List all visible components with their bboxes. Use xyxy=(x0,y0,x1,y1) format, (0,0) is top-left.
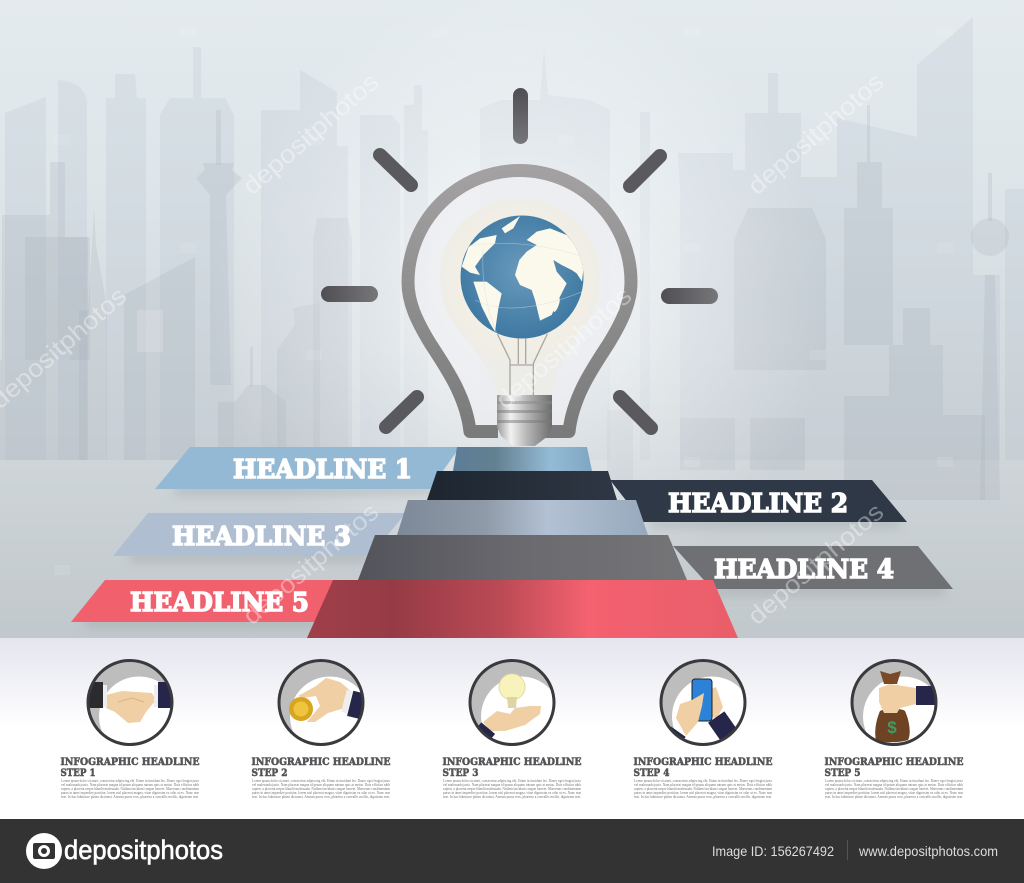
text block: step 4: Lorem ipsum dolor sit amet, consectetur adipiscing elit. Etiam in tincidunt leo. Donec eget feugiat justo xyxy=(634,779,772,784)
skyline xyxy=(0,0,1024,640)
text block: step 1: STEP 1 xyxy=(60,768,96,779)
text block: step 3: purus in amet imperdiet porttitor, lorem nisl placerat magna, vitae dignissim ex odio ut ex. Nunc non xyxy=(443,791,581,796)
text block: step 2: purus in amet imperdiet porttitor, lorem nisl placerat magna, vitae dignissim ex odio ut ex. Nunc non xyxy=(252,791,390,796)
ribbon: headline 4 xyxy=(673,546,953,589)
watermarks: depositphotos xyxy=(491,282,637,415)
text block: step 5: sapien, a placerat neque blandit malesuada. Nullam tincidunt congue laoreet. Maecenas condimentum xyxy=(825,787,963,792)
text block: step 1 xyxy=(60,757,200,800)
text block: step 2: sapien, a placerat neque blandit malesuada. Nullam tincidunt congue laoreet. Maecenas condimentum xyxy=(252,787,390,792)
text block: step 5: vel malesuada justo. Nam placerat magna id ipsum aliquam rutrum quis at metus. Duis efficitur nibh xyxy=(825,783,963,787)
ribbon: headline 3 xyxy=(113,513,406,556)
text block: step 3: Lorem ipsum dolor sit amet, consectetur adipiscing elit. Etiam in tincidunt leo. Donec eget feugiat justo xyxy=(443,779,581,784)
watermarks: depositphotos xyxy=(238,68,384,201)
step 3 xyxy=(397,500,648,535)
step 5 xyxy=(307,580,738,638)
watermarks xyxy=(0,68,889,631)
text block: step 3: sapien, a placerat neque blandit malesuada. Nullam tincidunt congue laoreet. Maecenas condimentum xyxy=(443,787,581,792)
text block: step 4: vel malesuada justo. Nam placerat magna id ipsum aliquam rutrum quis at metus. Duis efficitur nibh xyxy=(634,783,772,787)
light rays xyxy=(321,88,718,428)
text block: step 2: INFOGRAPHIC HEADLINE xyxy=(252,757,391,768)
text block: step 4 xyxy=(634,757,773,800)
step 4 xyxy=(358,535,687,580)
text block: step 1: vel malesuada justo. Nam placerat magna id ipsum aliquam rutrum quis at metus. Duis efficitur nibh xyxy=(61,783,199,787)
ribbon: headline 1 xyxy=(155,447,460,489)
text block: step 2 xyxy=(252,757,391,800)
text block: step 1: Lorem ipsum dolor sit amet, consectetur adipiscing elit. Etiam in tincidunt leo. Donec eget feugiat justo xyxy=(61,779,199,784)
text block: step 5: STEP 5 xyxy=(824,768,861,779)
text block: step 1: INFOGRAPHIC HEADLINE xyxy=(60,757,200,768)
step 1 xyxy=(453,447,592,471)
text block: step 2: STEP 2 xyxy=(252,768,288,779)
footer bar xyxy=(0,819,1024,883)
text block: step 1: erat. In hac habitasse platea dictumst. Aenean purus eros, pharetra a convallis mollis, dignissim erat. xyxy=(61,795,199,800)
bulb glass xyxy=(440,199,600,395)
ribbon: headline 2: HEADLINE 2 xyxy=(668,489,848,519)
ribbon: headline 4: HEADLINE 4 xyxy=(714,555,894,585)
text block: step 3: vel malesuada justo. Nam placerat magna id ipsum aliquam rutrum quis at metus. Duis efficitur nibh xyxy=(443,783,581,787)
icon: hand with bulb xyxy=(468,659,556,746)
stepped pyramid xyxy=(307,447,738,638)
lower panel xyxy=(0,638,1024,819)
text block: step 2: Lorem ipsum dolor sit amet, consectetur adipiscing elit. Etiam in tincidunt leo. Donec eget feugiat justo xyxy=(252,779,390,784)
step 2 xyxy=(427,471,617,500)
icon: handshake xyxy=(86,659,174,746)
ribbon: headline 5 xyxy=(71,580,340,622)
text block: step 2: erat. In hac habitasse platea dictumst. Aenean purus eros, pharetra a convallis mollis, dignissim erat. xyxy=(252,795,390,800)
globe xyxy=(460,216,587,338)
watermarks: depositphotos xyxy=(238,498,384,631)
bulb outline xyxy=(408,171,631,432)
text block: step 5: purus in amet imperdiet porttitor, lorem nisl placerat magna, vitae dignissim ex odio ut ex. Nunc non xyxy=(825,791,963,796)
background xyxy=(0,0,1024,640)
watermarks: depositphotos xyxy=(743,498,889,631)
text block: step 5: erat. In hac habitasse platea dictumst. Aenean purus eros, pharetra a convallis mollis, dignissim erat. xyxy=(825,795,963,800)
ribbon: headline 2 xyxy=(610,480,907,522)
watermarks: depositphotos xyxy=(743,68,889,201)
text block: step 5: INFOGRAPHIC HEADLINE xyxy=(824,757,964,768)
lightbulb xyxy=(408,171,631,446)
icon: hand with coin xyxy=(278,659,364,746)
camera watermark icons xyxy=(54,27,953,575)
text block: step 1: sapien, a placerat neque blandit malesuada. Nullam tincidunt congue laoreet. Maecenas condimentum xyxy=(61,787,199,792)
site url: www.depositphotos.com xyxy=(858,843,998,859)
text block: step 3: STEP 3 xyxy=(442,768,479,779)
screw base xyxy=(497,395,552,446)
text block: step 4: purus in amet imperdiet porttitor, lorem nisl placerat magna, vitae dignissim ex odio ut ex. Nunc non xyxy=(634,791,772,796)
footer logo xyxy=(26,833,223,869)
ribbon: headline 1: HEADLINE 1 xyxy=(233,455,412,485)
icon: hand with money bag xyxy=(850,659,938,746)
text block: step 3: erat. In hac habitasse platea dictumst. Aenean purus eros, pharetra a convallis mollis, dignissim erat. xyxy=(443,795,581,800)
filament xyxy=(497,334,547,395)
text block: step 4: sapien, a placerat neque blandit malesuada. Nullam tincidunt congue laoreet. Maecenas condimentum xyxy=(634,787,772,792)
text block: step 4: erat. In hac habitasse platea dictumst. Aenean purus eros, pharetra a convallis mollis, dignissim erat. xyxy=(634,795,772,800)
bulb interior xyxy=(408,171,631,432)
text block: step 4: STEP 4 xyxy=(634,768,670,779)
ribbon: headline 3: HEADLINE 3 xyxy=(172,522,351,552)
footer logo: depositphotos xyxy=(64,835,223,865)
image id: Image ID: 156267492 xyxy=(712,843,834,859)
text block: step 3: INFOGRAPHIC HEADLINE xyxy=(442,757,582,768)
soft ribbon shadows xyxy=(85,486,945,628)
text block: step 2: vel malesuada justo. Nam placerat magna id ipsum aliquam rutrum quis at metus. Duis efficitur nibh xyxy=(252,783,390,787)
text block: step 5 xyxy=(824,757,964,800)
text block: step 5: Lorem ipsum dolor sit amet, consectetur adipiscing elit. Etiam in tincidunt leo. Donec eget feugiat justo xyxy=(825,779,963,784)
icon: hands with phone xyxy=(660,659,746,746)
text block: step 3 xyxy=(442,757,582,800)
icon: hand with money bag: $ xyxy=(887,718,897,737)
ribbon: headline 5: HEADLINE 5 xyxy=(130,588,309,618)
text block: step 1: purus in amet imperdiet porttitor, lorem nisl placerat magna, vitae dignissim ex odio ut ex. Nunc non xyxy=(61,791,199,796)
text block: step 4: INFOGRAPHIC HEADLINE xyxy=(634,757,773,768)
